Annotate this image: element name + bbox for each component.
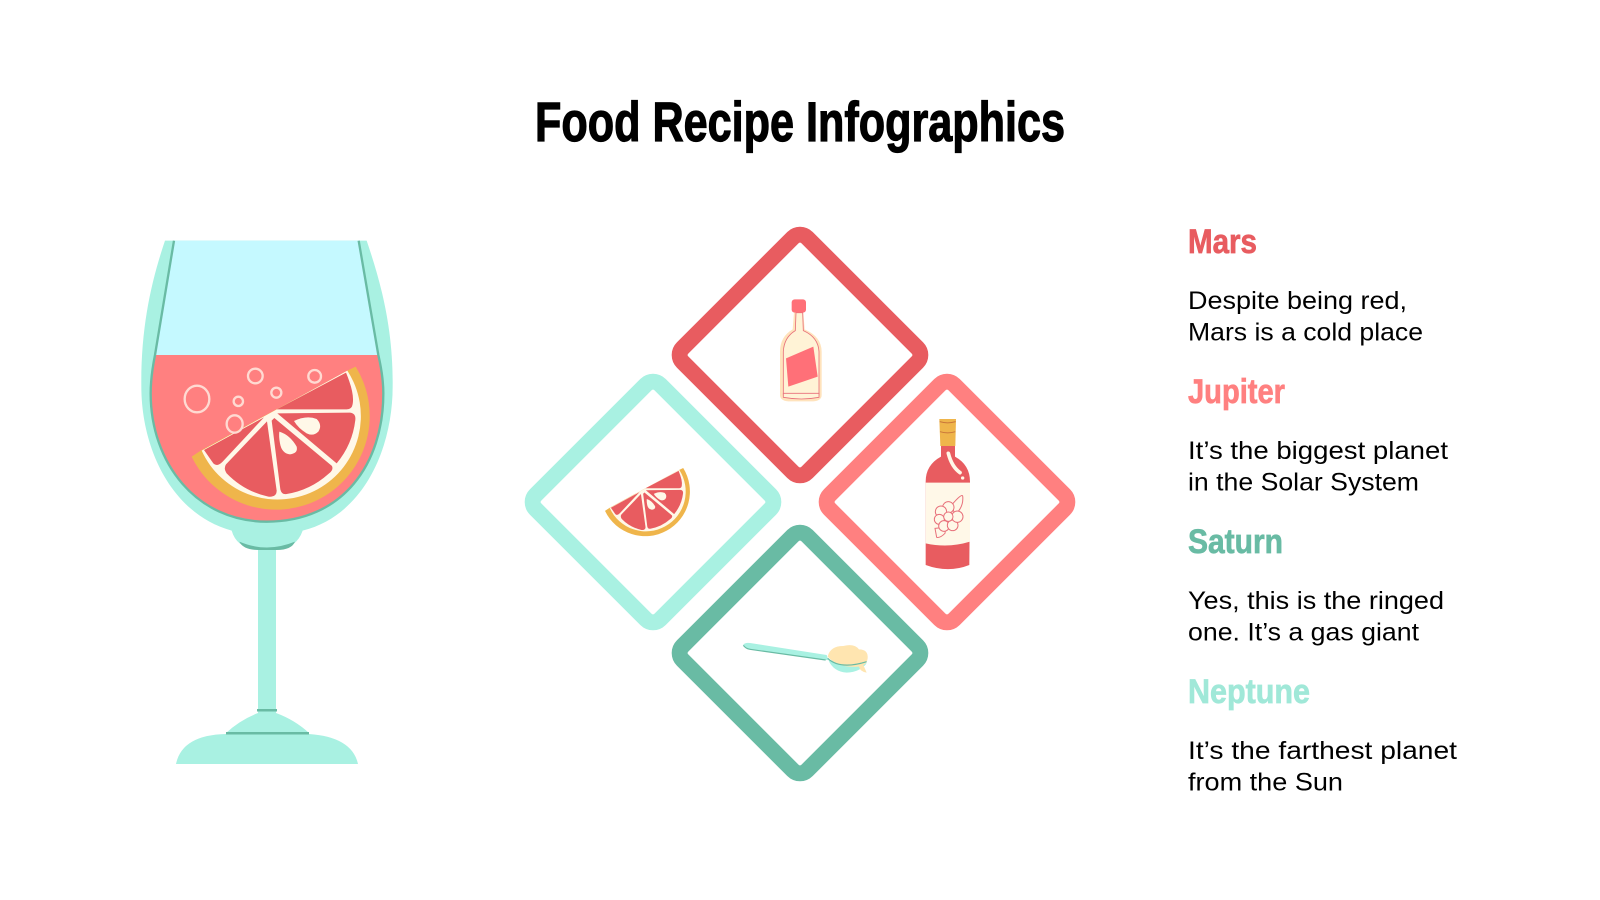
drink xyxy=(151,355,383,522)
description: Jupiter: It’s the biggest planet xyxy=(1188,437,1448,465)
heading: Saturn: Saturn xyxy=(1188,523,1283,561)
glass interior xyxy=(151,241,383,522)
glass outer body xyxy=(141,241,393,550)
icon: grapefruit slice xyxy=(605,468,690,536)
diamond: left mint xyxy=(529,378,777,626)
text block: Saturn xyxy=(1188,523,1444,646)
description: Mars: Despite being red, xyxy=(1188,287,1407,315)
description: Neptune xyxy=(1188,737,1457,796)
stem xyxy=(258,550,276,715)
text block: Mars xyxy=(1188,223,1423,346)
text block: Neptune xyxy=(1188,673,1457,796)
neck shadow xyxy=(239,542,295,550)
grapefruit slice in glass xyxy=(192,367,370,510)
glass outline xyxy=(151,241,383,522)
foot line xyxy=(226,732,309,734)
description: Saturn: one. It’s a gas giant xyxy=(1188,618,1419,646)
icon: spoon xyxy=(743,643,868,673)
diamond: top red xyxy=(676,231,924,479)
description: Saturn xyxy=(1188,587,1444,646)
icon: whisky bottle xyxy=(780,299,822,401)
description: Jupiter: in the Solar System xyxy=(1188,468,1419,496)
description: Neptune: It’s the farthest planet xyxy=(1188,737,1457,765)
description: Jupiter xyxy=(1188,437,1448,496)
foot cone xyxy=(226,713,309,733)
title: Food Recipe Infographics xyxy=(535,90,1065,153)
wine glass illustration xyxy=(141,241,393,550)
heading: Jupiter: Jupiter xyxy=(1188,373,1285,411)
diamond: bottom teal xyxy=(676,529,924,777)
description: Mars xyxy=(1188,287,1423,346)
bubbles xyxy=(185,369,321,433)
icon: wine bottle xyxy=(926,419,970,569)
description: Mars: Mars is a cold place xyxy=(1188,318,1423,346)
heading: Mars: Mars xyxy=(1188,223,1257,261)
heading: Neptune: Neptune xyxy=(1188,673,1310,711)
description: Neptune: from the Sun xyxy=(1188,768,1343,796)
foot xyxy=(176,734,358,764)
stem collar xyxy=(257,709,277,712)
glass stem and foot xyxy=(176,550,358,764)
diamond: right pink xyxy=(823,378,1071,626)
description: Saturn: Yes, this is the ringed xyxy=(1188,587,1444,615)
text block: Jupiter xyxy=(1188,373,1448,496)
